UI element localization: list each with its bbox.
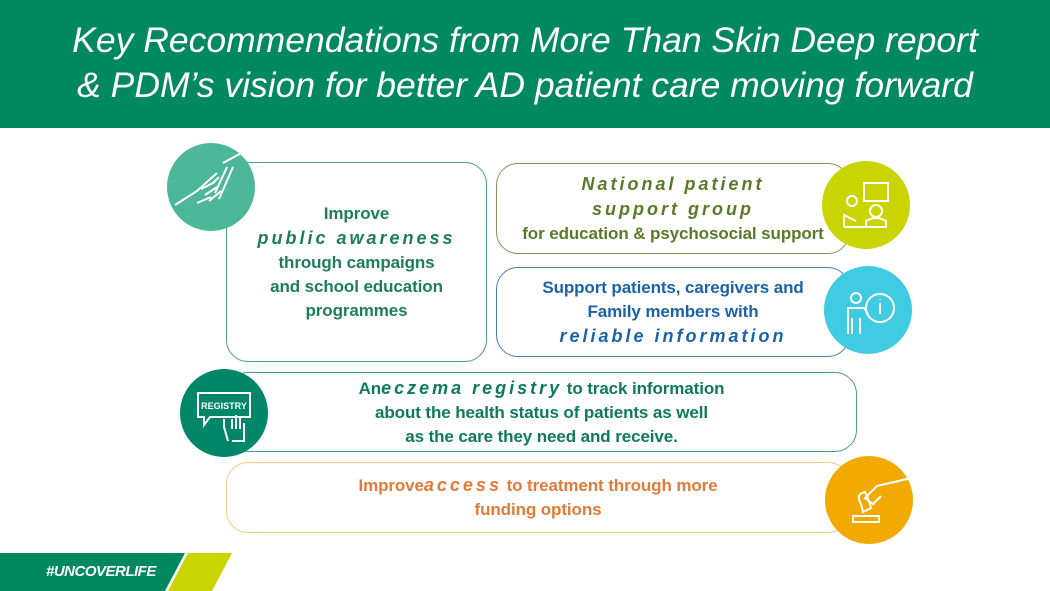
icon: hands xyxy=(167,143,255,231)
icon: registry xyxy=(180,369,268,457)
panel: national patient support group: support group xyxy=(592,198,754,218)
panel: national patient support group: National patient xyxy=(581,174,764,194)
panel: improve access: funding options xyxy=(475,500,601,519)
panel: reliable information: Family members with xyxy=(587,302,758,320)
panel: improve access: Improveaccess to treatment through more xyxy=(358,475,718,495)
panel: public awareness xyxy=(226,162,487,362)
header banner xyxy=(0,0,1050,128)
icon: access xyxy=(825,456,913,544)
panel: public awareness: public awareness xyxy=(257,228,456,248)
panel: eczema registry: about the health status of patients as well xyxy=(375,402,708,422)
panel: national patient support group xyxy=(496,163,850,254)
panel: public awareness: through campaigns xyxy=(278,252,435,272)
icon: registry: REGISTRY xyxy=(201,401,247,411)
icon: information xyxy=(824,266,912,354)
panel: reliable information: reliable information xyxy=(559,326,786,346)
panel: national patient support group: for education & psychosocial support xyxy=(522,224,824,242)
title: Key Recommendations from More Than Skin Deep report xyxy=(72,20,978,60)
panel: eczema registry: Aneczema registry to track information xyxy=(359,378,724,398)
hashtag: #UNCOVERLIFE xyxy=(46,563,156,580)
panel: public awareness: Improve xyxy=(324,204,389,222)
panel: reliable information: Support patients, caregivers and xyxy=(542,278,804,296)
footer hashtag banner xyxy=(0,553,232,591)
title xyxy=(72,20,980,105)
icon: support group xyxy=(822,161,910,249)
panel: eczema registry xyxy=(226,372,857,452)
panel: public awareness: programmes xyxy=(306,300,407,320)
title: & PDM’s vision for better AD patient care moving forward xyxy=(77,65,973,105)
panel: eczema registry: as the care they need and receive. xyxy=(405,426,678,446)
panel: reliable information xyxy=(496,267,850,357)
panel: improve access xyxy=(226,462,850,533)
panel: public awareness: and school education xyxy=(270,276,443,296)
